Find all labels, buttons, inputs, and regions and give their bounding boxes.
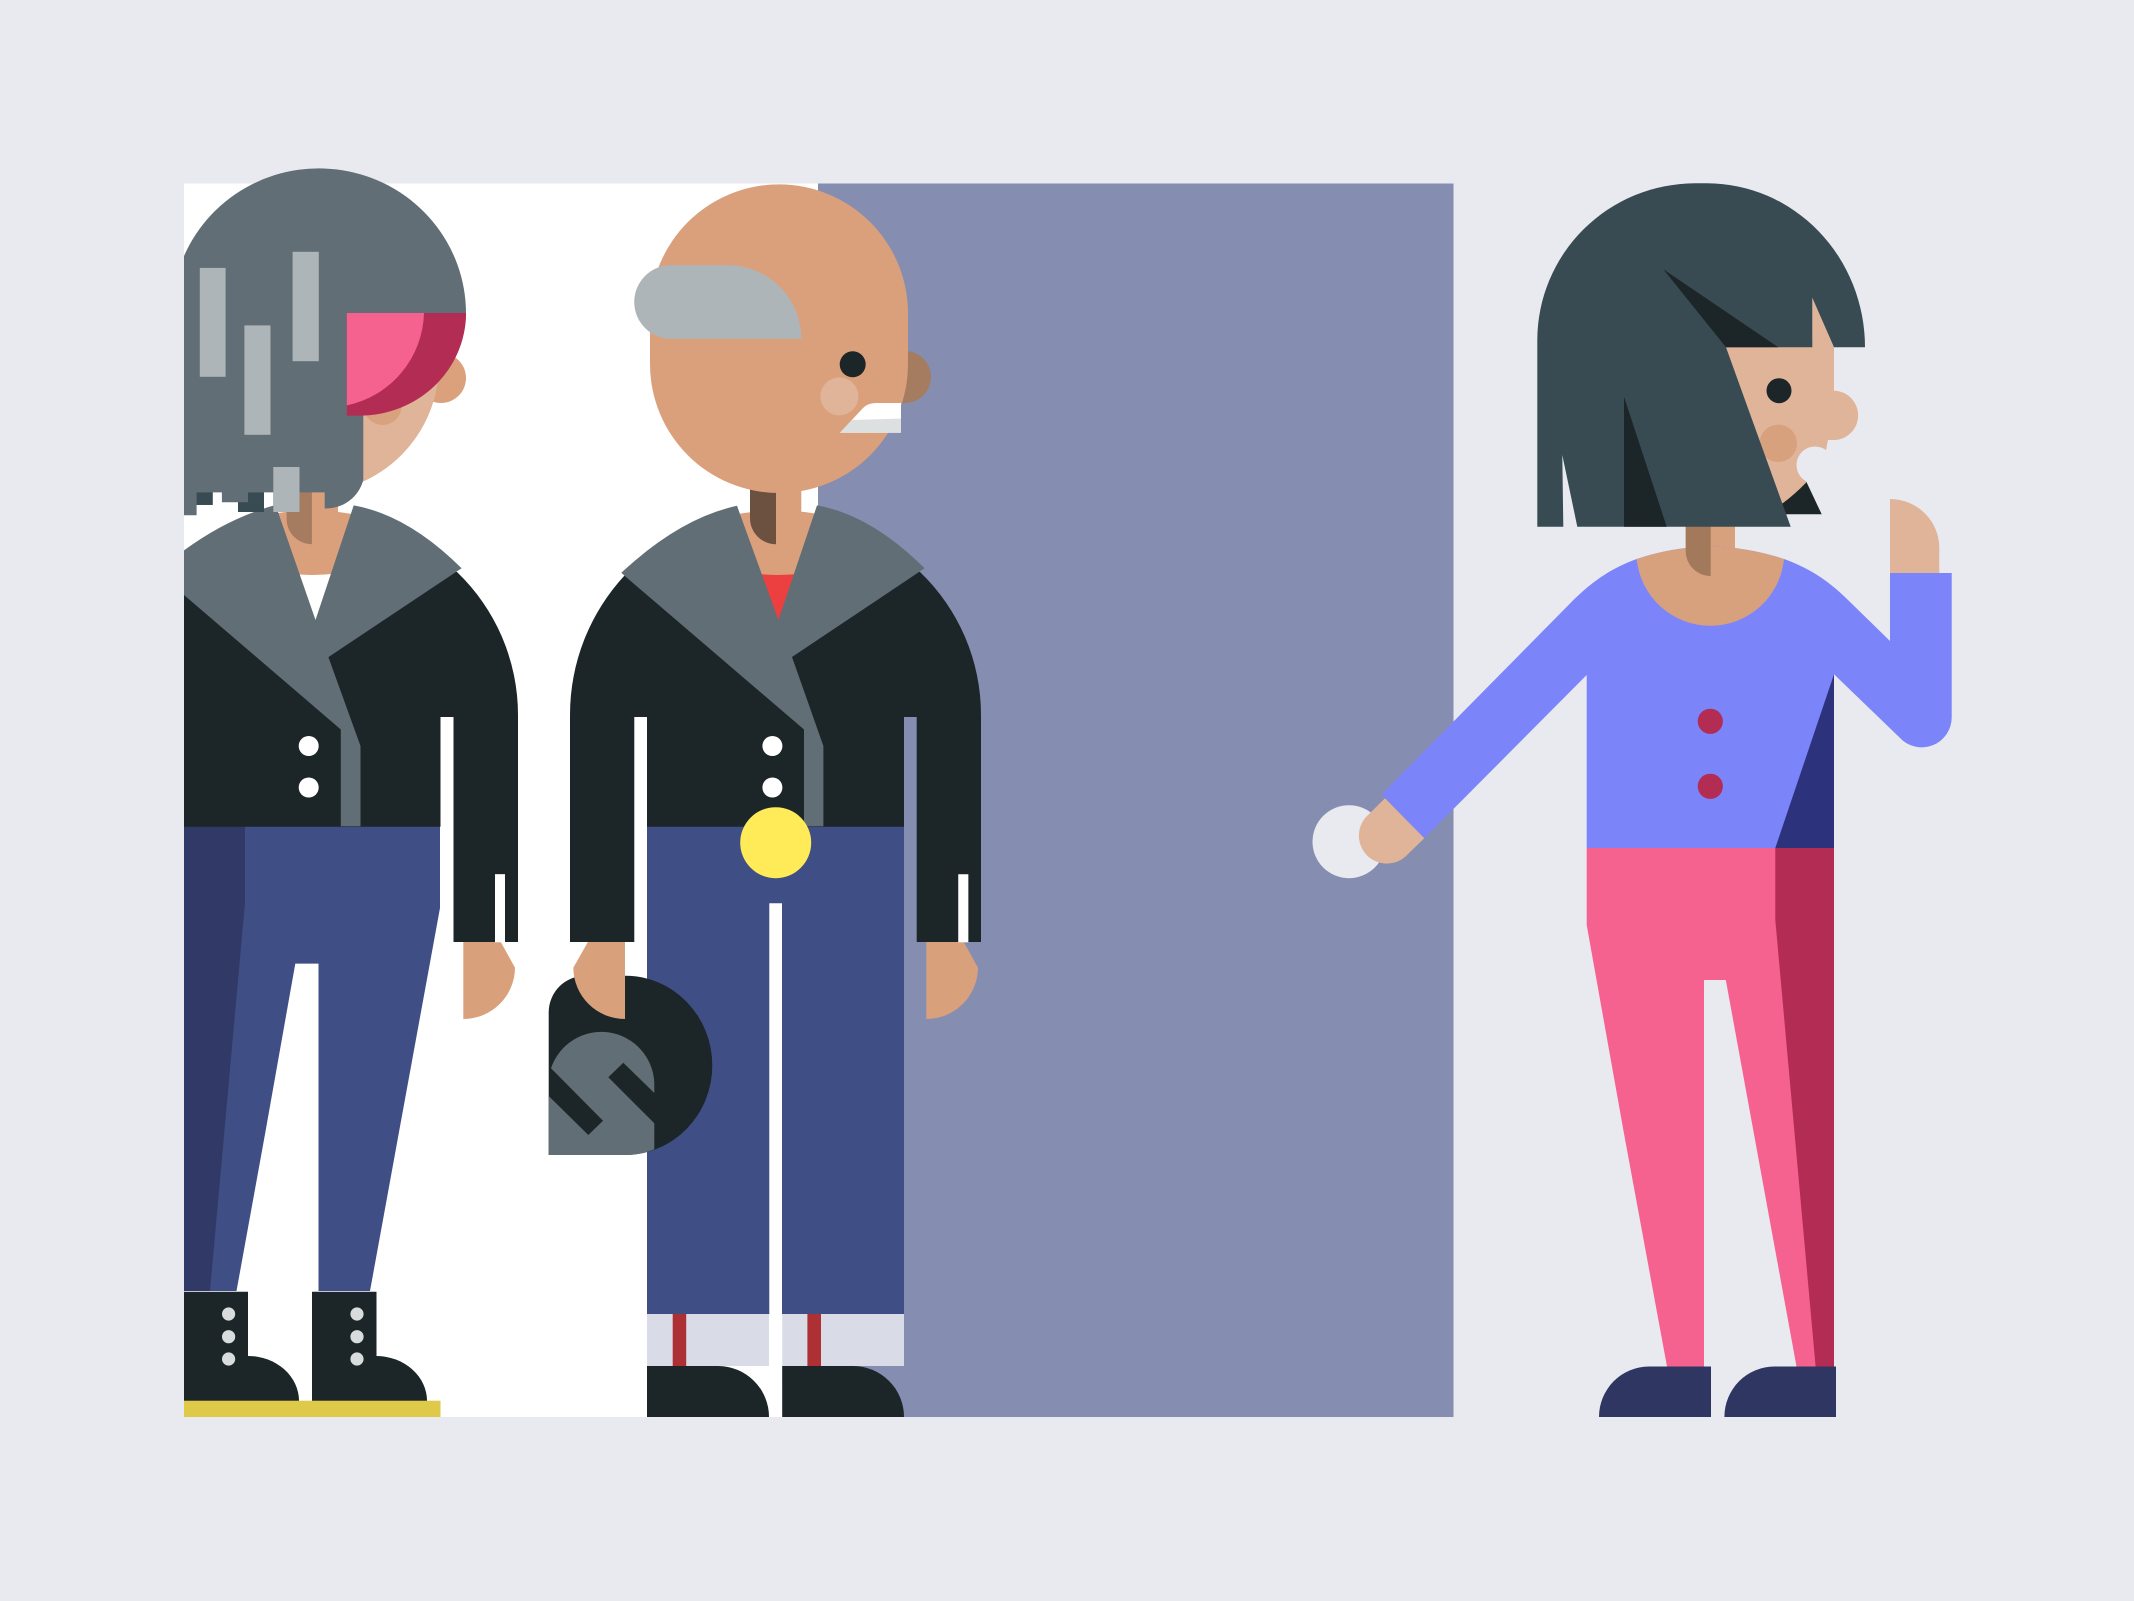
sweater buttons: [1698, 709, 1723, 799]
left rider lapels: [184, 505, 462, 826]
woman lowered hand: [1359, 798, 1424, 864]
left rider hand: [463, 940, 515, 1019]
bald rider head: [650, 184, 908, 493]
bald rider moustache: [840, 403, 901, 433]
bald rider neck and red shirt: [728, 485, 828, 625]
left rider neck and collar: [262, 490, 362, 625]
bald rider cuff slit: [958, 874, 968, 942]
bald rider cheek: [820, 377, 858, 415]
woman sweater: [1382, 547, 1952, 848]
bald rider trousers: [647, 826, 904, 1314]
bald rider buttons: [762, 736, 782, 798]
bald rider right hand: [926, 940, 978, 1019]
woman shoes: [1599, 1366, 1836, 1417]
woman raised hand: [1890, 499, 1939, 575]
left rider cuff slit: [495, 874, 505, 942]
sweater shadow: [1775, 674, 1834, 848]
woman collar skin: [1637, 520, 1784, 626]
left rider trousers: [184, 826, 440, 1291]
woman neck: [1686, 520, 1735, 560]
bald rider left hand: [573, 940, 625, 1019]
left rider boots: [184, 1292, 427, 1401]
woman trousers: [1587, 848, 1834, 1366]
yellow ground strip: [184, 1401, 440, 1417]
bald rider lapels: [621, 505, 925, 826]
bald rider grey hair: [634, 265, 801, 339]
panel: slate blue backdrop: [818, 184, 1454, 1417]
helmet worn by left rider: [184, 168, 466, 515]
bald rider eye: [840, 351, 866, 377]
white ball held by woman: [1312, 805, 1386, 878]
character: helmet rider (left): [184, 168, 518, 1417]
yellow badge: [740, 807, 811, 878]
character: woman (right): [1312, 183, 1952, 1417]
bald rider shoes: [647, 1366, 904, 1417]
carried helmet: [549, 976, 712, 1155]
left rider jacket: [184, 530, 518, 942]
left rider buttons: [299, 736, 319, 798]
bald rider socks: [647, 1314, 904, 1366]
left rider face: [230, 313, 466, 493]
character: bald rider (middle): [549, 184, 981, 1417]
panel: white backdrop: [184, 184, 818, 1417]
woman face: [1700, 298, 1858, 503]
woman chin shadow: [1780, 481, 1822, 514]
bald rider ear: [879, 351, 931, 403]
woman hair: [1537, 183, 1865, 527]
bald rider jacket: [570, 545, 981, 942]
